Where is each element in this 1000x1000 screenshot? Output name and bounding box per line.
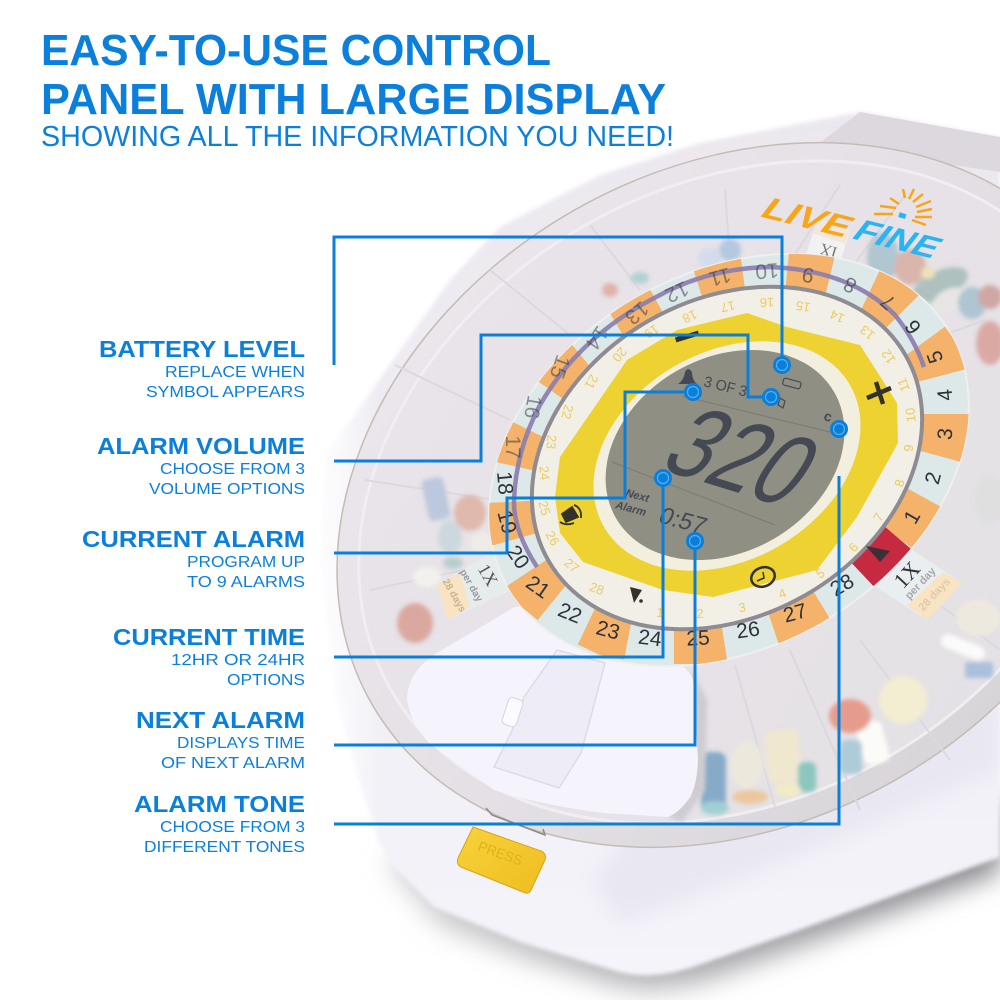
door shape	[407, 600, 698, 817]
leader line: current time	[334, 469, 672, 657]
device body	[320, 112, 1000, 975]
outer ring numbers: 14	[580, 322, 613, 354]
inner ring numbers: 4	[776, 585, 788, 602]
inner ring numbers: 7	[870, 510, 887, 524]
inner ring numbers: 11	[894, 376, 913, 394]
inner ring numbers: 25	[535, 499, 554, 517]
outer ring numbers: 18	[492, 470, 517, 496]
LCD next alarm label 2: Alarm	[613, 499, 648, 519]
drop shadow	[385, 800, 1000, 990]
icon: volume	[778, 398, 785, 408]
callout: alarm tone: CHOOSE FROM 3	[160, 819, 305, 836]
LIVE wordmark: LIVE	[754, 192, 862, 243]
LCD alarm counter: 3 OF 3	[702, 373, 749, 401]
LCD divider lines	[612, 396, 830, 525]
hinge strip	[817, 112, 1000, 172]
callout: current alarm	[82, 526, 305, 591]
outer ring numbers: 13	[620, 296, 653, 329]
outer ring numbers: 27	[781, 599, 809, 628]
icon: plus	[867, 382, 891, 404]
tab: 1X per day left: per day	[457, 568, 485, 604]
leader line: alarm tone	[334, 420, 848, 824]
callout: alarm volume: CHOOSE FROM 3	[160, 461, 305, 478]
leader line: current alarm	[334, 383, 702, 553]
body upper facet shade	[590, 700, 1000, 925]
callout: alarm tone: DIFFERENT TONES	[144, 839, 305, 856]
inner ring numbers: 14	[827, 307, 847, 326]
outer ring numbers: 28	[826, 570, 858, 601]
outer date ring base	[415, 171, 1000, 749]
inner ring numbers: 13	[857, 322, 878, 343]
outer ring numbers: 21	[522, 571, 554, 604]
callout: alarm tone: ALARM TONE	[134, 791, 305, 817]
dome latch notch	[486, 808, 545, 835]
tab: 1X per day left	[437, 552, 530, 620]
clear dome	[209, 2, 1000, 988]
leader line: next alarm	[334, 532, 704, 745]
outer ring numbers: 10	[754, 258, 780, 283]
callout: alarm volume	[97, 433, 305, 498]
inner ring numbers: 15	[795, 298, 812, 315]
callout: current time: OPTIONS	[227, 672, 305, 689]
LCD big time: 320	[643, 387, 842, 526]
callout: current time: 12HR OR 24HR	[171, 652, 305, 669]
icon: minus	[675, 331, 699, 342]
outer ring numbers: 17	[501, 435, 524, 459]
inner ring numbers: 2	[696, 606, 704, 621]
tab: 1X per day right: per day	[903, 565, 939, 602]
outer ring numbers: 20	[501, 541, 534, 573]
callout: current alarm: TO 9 ALARMS	[187, 574, 305, 591]
callout: battery level: REPLACE WHEN	[165, 364, 305, 381]
outer ring numbers: 4	[934, 388, 957, 402]
inner ring numbers: 17	[719, 298, 737, 315]
icon: down arrow	[630, 587, 643, 603]
inner ring numbers: 27	[561, 555, 582, 576]
outer ring numbers	[492, 258, 957, 651]
pills seen through dome	[397, 233, 1000, 815]
outer ring numbers: 1	[900, 506, 925, 528]
icon: ringing bell	[560, 505, 581, 524]
leader line: battery level	[334, 237, 791, 374]
inner ring numbers: 5	[813, 565, 828, 582]
inner ring numbers: 24	[536, 465, 553, 481]
tab: top XI	[805, 218, 850, 270]
logo: LiveFine	[754, 189, 950, 264]
inner ring numbers: 12	[878, 346, 899, 367]
LCD screen	[567, 308, 883, 602]
FINE wordmark: FINE	[846, 214, 950, 264]
callout: next alarm: OF NEXT ALARM	[161, 755, 305, 772]
inner ring numbers: 9	[901, 444, 916, 452]
title line 2: PANEL WITH LARGE DISPLAY	[41, 75, 666, 124]
door shadow	[668, 670, 707, 822]
dome inner rim	[238, 28, 1000, 956]
inner ring numbers: 23	[543, 434, 560, 450]
callout: current alarm: PROGRAM UP	[187, 554, 305, 571]
callout: next alarm: DISPLAYS TIME	[177, 735, 305, 752]
press button	[457, 827, 546, 893]
callout: next alarm: NEXT ALARM	[136, 707, 305, 733]
inner ring numbers: 20	[609, 344, 630, 365]
subtitle: SHOWING ALL THE INFORMATION YOU NEED!	[41, 121, 674, 153]
inner ring numbers: 21	[582, 372, 602, 392]
inner date disc	[470, 218, 984, 698]
door latch	[501, 697, 524, 728]
inner ring numbers: 22	[558, 403, 577, 421]
dial	[488, 253, 970, 667]
white dispensing door	[407, 600, 707, 822]
outer ring numbers: 23	[594, 616, 622, 645]
inner ring numbers: 8	[891, 478, 908, 489]
door slot	[494, 650, 605, 788]
outer ring numbers: 5	[923, 347, 948, 366]
LCD next alarm label: Next	[624, 487, 652, 505]
LCD next alarm time: 0:57	[654, 503, 711, 540]
callout: battery level	[99, 336, 305, 401]
inner ring numbers: 18	[680, 307, 700, 326]
sun dot	[898, 212, 906, 219]
icon: battery	[782, 378, 801, 389]
tab: 1X per day right: 1X	[888, 556, 925, 593]
icon: clock	[748, 564, 778, 590]
callout: current time	[113, 624, 305, 689]
callout: next alarm	[136, 707, 305, 772]
tab: 1X per day left: 1X	[474, 560, 502, 590]
press button: PRESS	[476, 838, 525, 869]
outer ring orange segments	[506, 273, 945, 638]
outer ring numbers: 6	[901, 315, 926, 338]
inner ring numbers: 19	[641, 321, 662, 342]
outer ring numbers: 8	[840, 272, 860, 297]
callout: current time: CURRENT TIME	[113, 624, 305, 650]
tab: 1X per day right: 28 days	[917, 576, 953, 614]
outer ring numbers: 2	[921, 470, 946, 487]
leader line: alarm volume	[334, 335, 780, 461]
outer ring numbers: 19	[492, 508, 521, 536]
dome compartment dividers	[365, 185, 1000, 825]
callout: battery level: BATTERY LEVEL	[99, 336, 305, 362]
yellow control plate	[555, 313, 898, 597]
outer ring numbers: 16	[519, 393, 546, 420]
product: pill dispenser	[209, 2, 1000, 990]
icon: sun rays	[874, 189, 932, 225]
cream LCD surround	[552, 295, 902, 617]
outer ring numbers: 3	[934, 427, 957, 441]
tab: 1X per day left: 28 days	[440, 577, 468, 615]
outer ring numbers: 25	[686, 626, 710, 651]
icon: bell	[678, 369, 697, 384]
outer ring red pointer segment	[862, 537, 897, 574]
title	[41, 26, 674, 153]
tab: top XI: IX	[818, 239, 839, 260]
outer ring numbers: 15	[545, 352, 574, 382]
callout: alarm volume: VOLUME OPTIONS	[149, 481, 305, 498]
outer ring numbers: 22	[555, 598, 585, 629]
inner ring numbers: 28	[587, 579, 606, 598]
outer ring numbers: 12	[661, 276, 692, 307]
outer ring numbers: 24	[637, 626, 663, 651]
outer ring numbers: 7	[876, 289, 900, 314]
LCD C symbol: c	[822, 407, 834, 425]
body left fade	[295, 340, 380, 860]
inner ring numbers: 6	[845, 540, 861, 555]
inner ring numbers: 1	[656, 605, 664, 620]
outer ring numbers: 26	[735, 617, 761, 644]
inner ring numbers: 16	[759, 295, 774, 310]
outer ring numbers: 9	[800, 262, 816, 287]
callout: alarm volume: ALARM VOLUME	[97, 433, 305, 459]
title: EASY-TO-USE CONTROL	[41, 26, 551, 75]
inner ring numbers: 3	[737, 599, 747, 616]
purple reflection ring	[514, 267, 924, 567]
callout: alarm tone	[134, 791, 305, 856]
callout: current alarm: CURRENT ALARM	[82, 526, 305, 552]
pointer arrow	[866, 546, 890, 562]
tab: 1X per day right	[870, 545, 962, 620]
inner ring numbers	[535, 295, 919, 621]
callout: battery level: SYMBOL APPEARS	[146, 384, 305, 401]
outer ring numbers: 11	[706, 263, 733, 290]
inner ring numbers: 26	[542, 528, 563, 548]
inner ring numbers: 10	[902, 407, 919, 423]
